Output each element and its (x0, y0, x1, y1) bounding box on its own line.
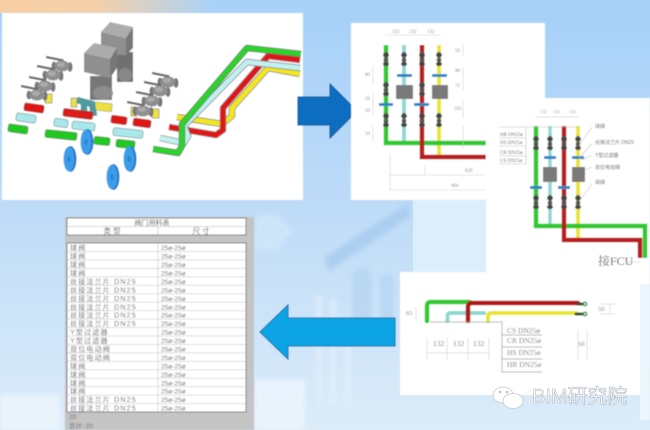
table rows: 25ø-25ø (161, 279, 186, 286)
table rows: 球阀 (70, 370, 86, 379)
table rows: 球阀 (70, 252, 86, 260)
table rows: 25ø-25ø (161, 270, 186, 278)
dimension labels: 132 (409, 30, 417, 35)
dimension labels: 132 (392, 30, 400, 35)
table header: 尺寸 (192, 226, 212, 236)
section labels: 132 (473, 339, 484, 348)
section pipes (427, 302, 587, 321)
table rows: 球阀 (70, 387, 86, 396)
table rows: 球阀 (70, 361, 86, 370)
table rows: 25ø-25ø (161, 338, 186, 345)
table rows: 25ø-25ø (161, 363, 186, 370)
section labels: CR DN25ø (507, 336, 541, 345)
table rows: 25ø-25ø (161, 355, 186, 362)
table rows: 双位电动阀 (70, 344, 111, 354)
table rows: 25ø-25ø (161, 313, 186, 320)
section labels: 50 (578, 341, 584, 348)
panel: valve schedule table (65, 217, 254, 430)
bent pipe run (153, 48, 301, 153)
pipe labels (500, 109, 576, 164)
table rows: 丝接法兰片 DN25 (70, 294, 137, 303)
table rows: 25ø-25ø (161, 346, 186, 354)
table rows: 丝接法兰片 DN25 (70, 277, 137, 286)
component labels: 双位电动阀 (595, 164, 620, 171)
vertical risers (386, 45, 486, 157)
dimension labels: 50 (365, 109, 370, 114)
table rows: 25ø-25ø (161, 296, 186, 303)
section labels: CS DN25ø (507, 326, 540, 335)
component labels: 球阀 (595, 179, 605, 186)
table rows: 25ø-25ø (161, 330, 186, 337)
valves and actuators (530, 136, 585, 209)
table rows: 球阀 (70, 268, 86, 278)
table rows (67, 243, 246, 413)
table rows: 25ø-25ø (161, 406, 186, 413)
table rows: 25ø-25ø (161, 380, 186, 387)
dimension labels: 80 (365, 73, 370, 78)
dimension labels: 72 (455, 84, 460, 89)
table rows: Y型过滤器 (70, 336, 109, 345)
table header: 类型 (104, 226, 122, 236)
table footer: 总计: 20 (69, 421, 93, 430)
table rows: 25ø-25ø (161, 287, 186, 294)
icon: motorised actuators (71, 22, 133, 116)
icon: blue flanges (64, 129, 136, 190)
valve symbols (379, 52, 448, 127)
dimension labels: 50 (455, 49, 460, 54)
panel: section view (400, 272, 650, 420)
icon: right ball valves (127, 73, 178, 118)
pipe labels: HS DN25ø (500, 141, 523, 146)
pipes (536, 126, 645, 258)
table rows: 丝接法兰片 DN25 (70, 311, 137, 320)
watermark: BIM研究院 (493, 385, 628, 408)
table rows: 丝接法兰片 DN25 (70, 404, 137, 413)
watermark text: BIM研究院 (532, 385, 628, 408)
table rows: 双位电动阀 (70, 353, 111, 362)
panel: elevation with FCU connection (486, 98, 650, 285)
leader lines (499, 117, 640, 262)
section labels (406, 306, 604, 369)
table rows: 25ø-25ø (161, 304, 186, 311)
table header: 阀门用料表 (134, 218, 170, 227)
arrow: left to schedule (260, 305, 395, 359)
dimension labels: 26 (365, 97, 370, 102)
dimension labels (365, 30, 473, 189)
section labels: 65 (406, 310, 412, 317)
table rows: 球阀 (70, 243, 86, 252)
component labels: Y型过滤器 (595, 152, 618, 159)
table rows: 25ø-25ø (161, 321, 186, 328)
table rows: 丝接法兰片 DN25 (70, 302, 137, 311)
component labels (595, 123, 634, 186)
section labels: HR DN25ø (507, 360, 542, 369)
table rows: 25ø-25ø (161, 262, 186, 269)
table rows: 25ø-25ø (161, 397, 186, 404)
dimension labels: 132 (427, 30, 435, 35)
dimension labels: 80 (455, 69, 460, 74)
table rows: 25ø-25ø (161, 245, 186, 252)
pipe labels: 132 (553, 109, 560, 114)
label: connect to FCU: 接FCU (598, 253, 634, 268)
icon: left ball valves (21, 57, 72, 103)
dimension labels: 904 (451, 184, 459, 189)
panel: 3D exploded valve model (2, 13, 303, 200)
pipe labels: CS DN25ø (500, 159, 523, 164)
short cut pipes (8, 103, 151, 149)
dimensions (373, 35, 486, 190)
pipe labels: 132 (540, 109, 547, 114)
pipe labels: CR DN25ø (500, 151, 523, 156)
component labels: 球阀 (595, 123, 605, 130)
table rows: 25ø-25ø (161, 254, 186, 260)
table footer (69, 414, 93, 430)
section labels: HS DN25ø (507, 348, 541, 357)
table rows: 丝接法兰片 DN25 (70, 395, 137, 404)
table footer: 20 (69, 414, 77, 421)
icon: WeChat logo (493, 387, 523, 408)
table rows: 丝接法兰片 DN25 (70, 319, 137, 328)
table rows: 25ø-25ø (161, 389, 186, 396)
component labels: 丝接法兰片 DN25 (595, 139, 634, 146)
section leader lines (416, 304, 615, 372)
table rows: 球阀 (70, 378, 86, 387)
table rows: Y型过滤器 (70, 328, 109, 337)
table rows: 丝接法兰片 DN25 (70, 285, 137, 294)
table header (67, 218, 246, 236)
dimension labels: 620 (465, 169, 473, 174)
pipe labels: HR DN25ø (500, 133, 523, 138)
table rows: 球阀 (70, 260, 86, 269)
dimension labels: 50 (365, 132, 370, 137)
dimension labels: 105 (454, 107, 462, 112)
section labels: 50 (598, 306, 604, 313)
arrow: right to 2D plan (298, 84, 357, 138)
panel: plan drawing with dimensions (351, 23, 545, 200)
section labels: 132 (433, 339, 444, 348)
table rows: 25ø-25ø (161, 372, 186, 379)
pipe labels: 132 (569, 109, 576, 114)
section labels: 132 (453, 339, 464, 348)
